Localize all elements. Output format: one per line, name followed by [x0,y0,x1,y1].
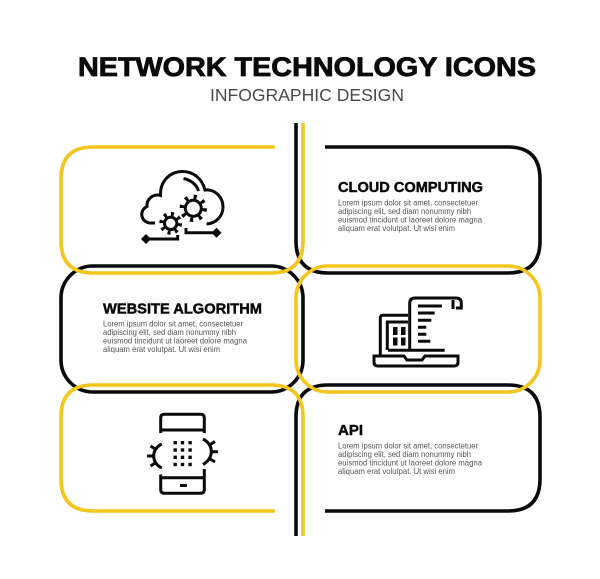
text block: api: aliquam erat volutpat. Ut wisi enim [338,467,455,476]
text block: website algorithm: aliquam erat volutpat. Ut wisi enim [103,345,220,354]
panel: website algorithm outline [61,266,303,392]
icon: phone with gear [147,414,218,493]
panel: cloud computing outline [296,123,540,273]
panel: phone icon outline [61,385,303,536]
text block: api: Lorem ipsum dolor sit amet, consectetuer [338,442,478,450]
text block: website algorithm [103,302,262,354]
subtitle: INFOGRAPHIC DESIGN [210,85,404,105]
text block: api: euismod tincidunt ut laoreet dolore magna [338,458,483,468]
icon: laptop with document [374,298,461,366]
text block: api: adipiscing elit, sed diam nonummy nibh [338,450,471,459]
text block: cloud computing: Lorem ipsum dolor sit amet, consectetuer [338,198,478,208]
text block: cloud computing: aliquam erat volutpat. Ut wisi enim [338,224,455,233]
panel: cloud icon outline [61,123,303,273]
text block: website algorithm: WEBSITE ALGORITHM [103,302,262,318]
panel: api outline [296,385,540,536]
text block: website algorithm: euismod tincidunt ut laoreet dolore magna [103,336,248,346]
text block: cloud computing [338,180,483,233]
title: NETWORK TECHNOLOGY ICONS [78,52,536,82]
panel: laptop icon outline [296,266,540,392]
text block: api: API [338,423,363,439]
text block: website algorithm: adipiscing elit, sed diam nonummy nibh [103,328,236,337]
text block: cloud computing: CLOUD COMPUTING [338,180,483,196]
icon: cloud with gears [141,172,223,244]
text block: website algorithm: Lorem ipsum dolor sit amet, consectetuer [103,320,243,328]
text block: cloud computing: euismod tincidunt ut laoreet dolore magna [338,216,483,224]
text block: cloud computing: adipiscing elit, sed diam nonummy nibh [338,207,471,216]
text block: api [338,423,483,476]
